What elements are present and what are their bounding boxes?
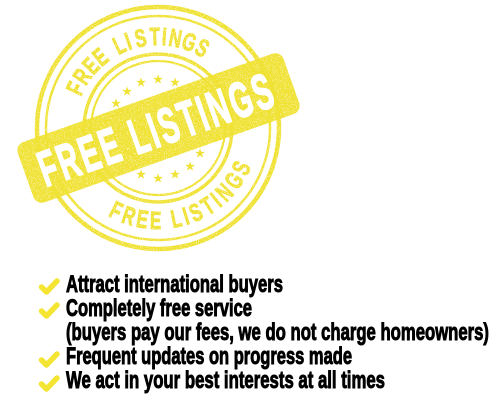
top ring text: L <box>109 30 130 60</box>
bottom ring text: E <box>134 205 150 234</box>
bottom ring text: T <box>196 192 220 221</box>
stamp rings <box>37 7 279 249</box>
check icons <box>42 281 57 389</box>
stars: ★ <box>122 86 132 98</box>
list text: Attract international buyers <box>66 271 283 298</box>
top ring text: N <box>167 24 184 53</box>
top ring text: S <box>190 33 214 63</box>
stars: ★ <box>153 74 163 86</box>
top ring text: F <box>61 78 91 99</box>
bottom ring text: I <box>180 202 193 231</box>
list text <box>66 271 489 394</box>
top ring text: R <box>68 64 98 90</box>
checklist <box>42 271 489 394</box>
bottom ring text: L <box>168 204 184 234</box>
top ring text: T <box>149 23 160 51</box>
bottom ring text: I <box>206 188 227 213</box>
top ring text: E <box>87 43 114 72</box>
stars <box>111 74 205 185</box>
top ring text: E <box>77 52 105 80</box>
bottom ring text <box>105 157 257 235</box>
stars: ★ <box>185 161 195 173</box>
bottom ring text: R <box>119 201 139 231</box>
stars: ★ <box>136 77 146 89</box>
stars: ★ <box>170 169 180 181</box>
bottom ring text: F <box>105 196 127 226</box>
top ring text: S <box>132 24 149 53</box>
bottom ring text: G <box>219 167 250 194</box>
list text: Completely free service <box>66 295 252 322</box>
top ring text: G <box>178 27 200 58</box>
bottom ring text: E <box>150 207 162 235</box>
top ring text: I <box>161 23 168 51</box>
stars: ★ <box>153 173 163 185</box>
stamp <box>15 7 302 249</box>
top ring text <box>61 23 214 99</box>
stars: ★ <box>111 98 121 110</box>
bottom ring text: S <box>227 157 257 179</box>
stars: ★ <box>195 148 205 160</box>
banner text: FREE LISTINGS <box>31 61 283 197</box>
stars: ★ <box>170 77 180 89</box>
list text: Frequent updates on progress made <box>66 343 352 370</box>
banner <box>15 51 302 205</box>
stars: ★ <box>136 169 146 181</box>
top ring text: I <box>122 28 135 56</box>
bottom ring text: N <box>210 178 239 207</box>
bottom ring text: S <box>185 198 207 228</box>
